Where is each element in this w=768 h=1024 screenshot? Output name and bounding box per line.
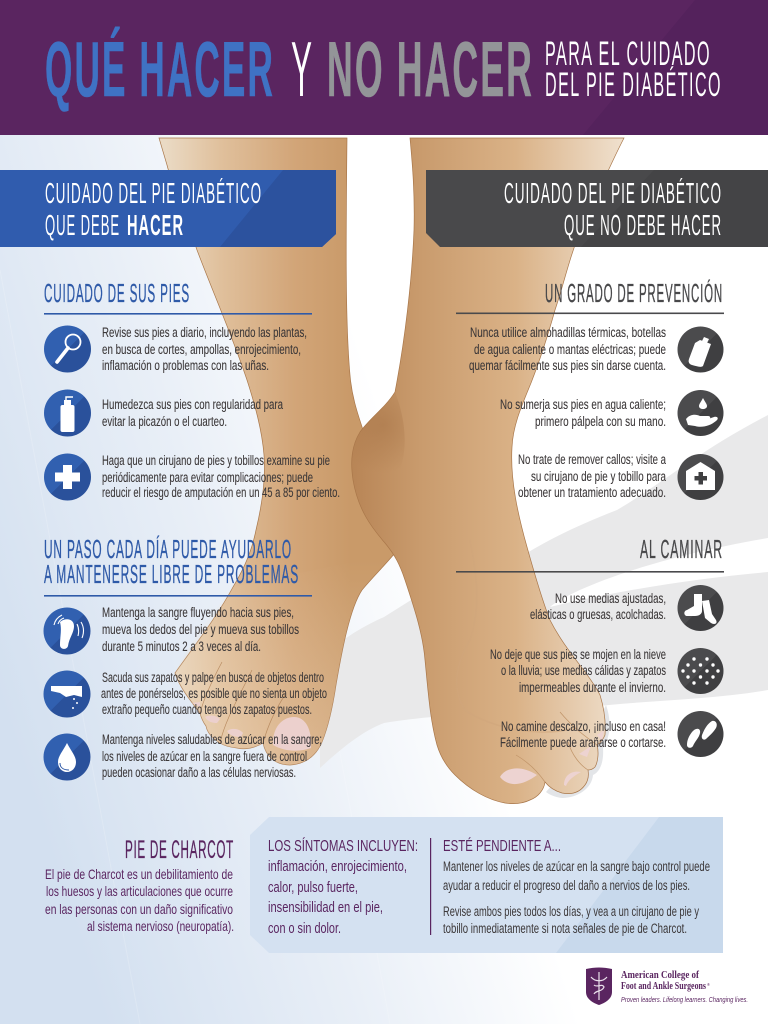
panel: charcot description [45, 836, 234, 934]
text: PIE DE CHARCOT [125, 836, 234, 864]
icon: magnifier [44, 326, 91, 372]
icon: shaking shoe [44, 670, 90, 718]
text: watch for [443, 836, 710, 936]
icon: socks [678, 585, 724, 631]
panel: foot care: CUIDADO DE SUS PIES [44, 278, 190, 308]
text: shake shoes: antes de ponérselos, es posible que no sienta un objeto [101, 686, 327, 701]
text: no tight socks [530, 591, 666, 622]
panel: do banner: QUE DEBE [45, 210, 120, 242]
text: no soaking: primero pálpela con su mano. [535, 414, 666, 429]
text: no going barefoot: No camine descalzo, ¡incluso en casa! [501, 719, 666, 734]
text: see surgeon: reducir el riesgo de amputación en un 45 a 85 por ciento. [102, 485, 340, 500]
text: inspect feet: inflamación o problemas con las uñas. [102, 358, 269, 373]
text: keep feet dry: o la lluvia; use medias cálidas y zapatos [501, 663, 666, 678]
text: keep blood flowing: mueva los dedos del pie y mueva sus tobillos [102, 622, 299, 637]
text: no going barefoot [500, 719, 666, 750]
text: charcot definition: los huesos y las articulaciones que ocurre [46, 883, 233, 899]
text: symptoms: con o sin dolor. [268, 921, 341, 937]
text: keep blood flowing [102, 605, 299, 654]
text: no heating pads [469, 325, 666, 373]
text: see surgeon: Haga que un cirujano de pies y tobillos examine su pie [102, 453, 330, 468]
text: moisturize [102, 397, 283, 429]
icon: moving foot [44, 608, 90, 654]
text: no removing calluses: No trate de remover callos; visite a [518, 452, 666, 467]
text: no heating pads: de agua caliente o mantas eléctricas; puede [474, 342, 666, 357]
panel: do banner: CUIDADO DEL PIE DIABÉTICO [45, 177, 262, 210]
heading: un paso cada dia [44, 534, 299, 589]
title: NO HACER [327, 25, 534, 113]
text: moisturize: Humedezca sus pies con regularidad para [102, 397, 283, 412]
right foot [352, 138, 624, 804]
panel: daily step: UN PASO CADA DÍA PUEDE AYUDARLO [44, 534, 292, 564]
icon: lotion bottle [44, 390, 91, 436]
panel: do not banner [426, 170, 768, 247]
text: healthy sugar levels [102, 732, 322, 780]
logo: american college of foot and ankle surgeons [586, 968, 748, 1005]
header band [0, 0, 768, 135]
panel: prevention [456, 278, 724, 500]
icon: hand with drop [678, 390, 724, 436]
right foot shadow [546, 705, 610, 798]
logo: american college of foot and ankle surgeons: American College of [621, 970, 700, 981]
icon: water drop [44, 734, 90, 780]
text: charcot definition: en las personas con un daño significativo [45, 901, 233, 917]
text: shake shoes [101, 670, 327, 717]
text: keep feet dry: impermeables durante el invierno. [519, 680, 666, 695]
left foot [159, 138, 395, 765]
text: inspect feet: Revise sus pies a diario, incluyendo las plantas, [102, 325, 307, 340]
text: healthy sugar levels: pueden ocasionar daño a las células nerviosas. [102, 765, 296, 780]
text: moisturize: evitar la picazón o el cuarteo. [102, 414, 227, 429]
text: watch for: ESTÉ PENDIENTE A... [443, 836, 561, 855]
text: healthy sugar levels: Mantenga niveles saludables de azúcar en la sangre; [102, 732, 322, 747]
text: symptoms: calor, pulso fuerte, [268, 880, 358, 896]
panel: symptoms and watch [250, 817, 723, 953]
text: charcot definition: al sistema nervioso (neuropatía). [87, 918, 234, 934]
text: no removing calluses: su cirujano de pie y tobillo para [531, 469, 666, 484]
panel: do banner [0, 170, 336, 247]
text: charcot definition: El pie de Charcot es un debilitamiento de [45, 866, 233, 882]
panel: foot care [44, 278, 340, 500]
icon: rain drops [678, 648, 724, 694]
text: see surgeon [102, 453, 340, 500]
title: QUÉ HACER [45, 25, 275, 113]
text: healthy sugar levels: los niveles de azúcar en la sangre fuera de control [102, 749, 307, 764]
illustration: feet [159, 138, 624, 804]
text: keep blood flowing: durante 5 minutos 2 a 3 veces al día. [102, 639, 261, 654]
text: charcot definition [45, 866, 234, 934]
text: no tight socks: elásticas o gruesas, acolchadas. [530, 607, 666, 622]
text: symptoms: insensibilidad en el pie, [268, 900, 383, 916]
text: keep feet dry: No deje que sus pies se mojen en la nieve [490, 647, 666, 662]
text: symptoms [268, 836, 418, 937]
text: no soaking: No sumerja sus pies en agua caliente; [500, 397, 666, 412]
text: no going barefoot: Fácilmente puede arañarse o cortarse. [500, 735, 666, 750]
text: keep blood flowing: Mantenga la sangre fluyendo hacia sus pies, [102, 605, 294, 620]
grey swooshes [320, 415, 768, 768]
text: no heating pads: Nunca utilice almohadillas térmicas, botellas [470, 325, 666, 340]
text: no heating pads: quemar fácilmente sus pies sin darse cuenta. [469, 358, 666, 373]
text: keep feet dry [490, 647, 666, 695]
logo: american college of foot and ankle surgeons: Foot and Ankle Surgeons [621, 981, 706, 992]
text: no removing calluses [518, 452, 666, 500]
panel: walking [456, 534, 724, 757]
text: symptoms: LOS SÍNTOMAS INCLUYEN: [268, 836, 418, 855]
panel: daily step: A MANTENERSE LIBRE DE PROBLEMAS [44, 559, 299, 589]
icon: clinic house [678, 454, 724, 500]
text: shake shoes: extraño pequeño cuando tenga los zapatos puestos. [102, 702, 312, 717]
text: see surgeon: periódicamente para evitar complicaciones; puede [102, 470, 313, 485]
icon: medical cross [44, 454, 91, 500]
icon: hot water bottle [678, 326, 724, 372]
icon: footprints [678, 711, 724, 757]
panel: do banner: HACER [127, 210, 184, 242]
logo: american college of foot and ankle surgeons: ® [707, 982, 710, 987]
text: shake shoes: Sacuda sus zapatos y palpe en busca de objetos dentro [102, 670, 324, 685]
text: no removing calluses: obtener un tratamiento adecuado. [518, 485, 666, 500]
text: no tight socks: No use medias ajustadas, [555, 591, 666, 606]
text: inspect feet [102, 325, 307, 373]
panel: daily step [44, 534, 327, 780]
title: Y [291, 25, 312, 113]
text: no soaking [500, 397, 666, 429]
text: symptoms: inflamación, enrojecimiento, [268, 859, 407, 875]
text: inspect feet: en busca de cortes, ampollas, enrojecimiento, [102, 342, 301, 357]
